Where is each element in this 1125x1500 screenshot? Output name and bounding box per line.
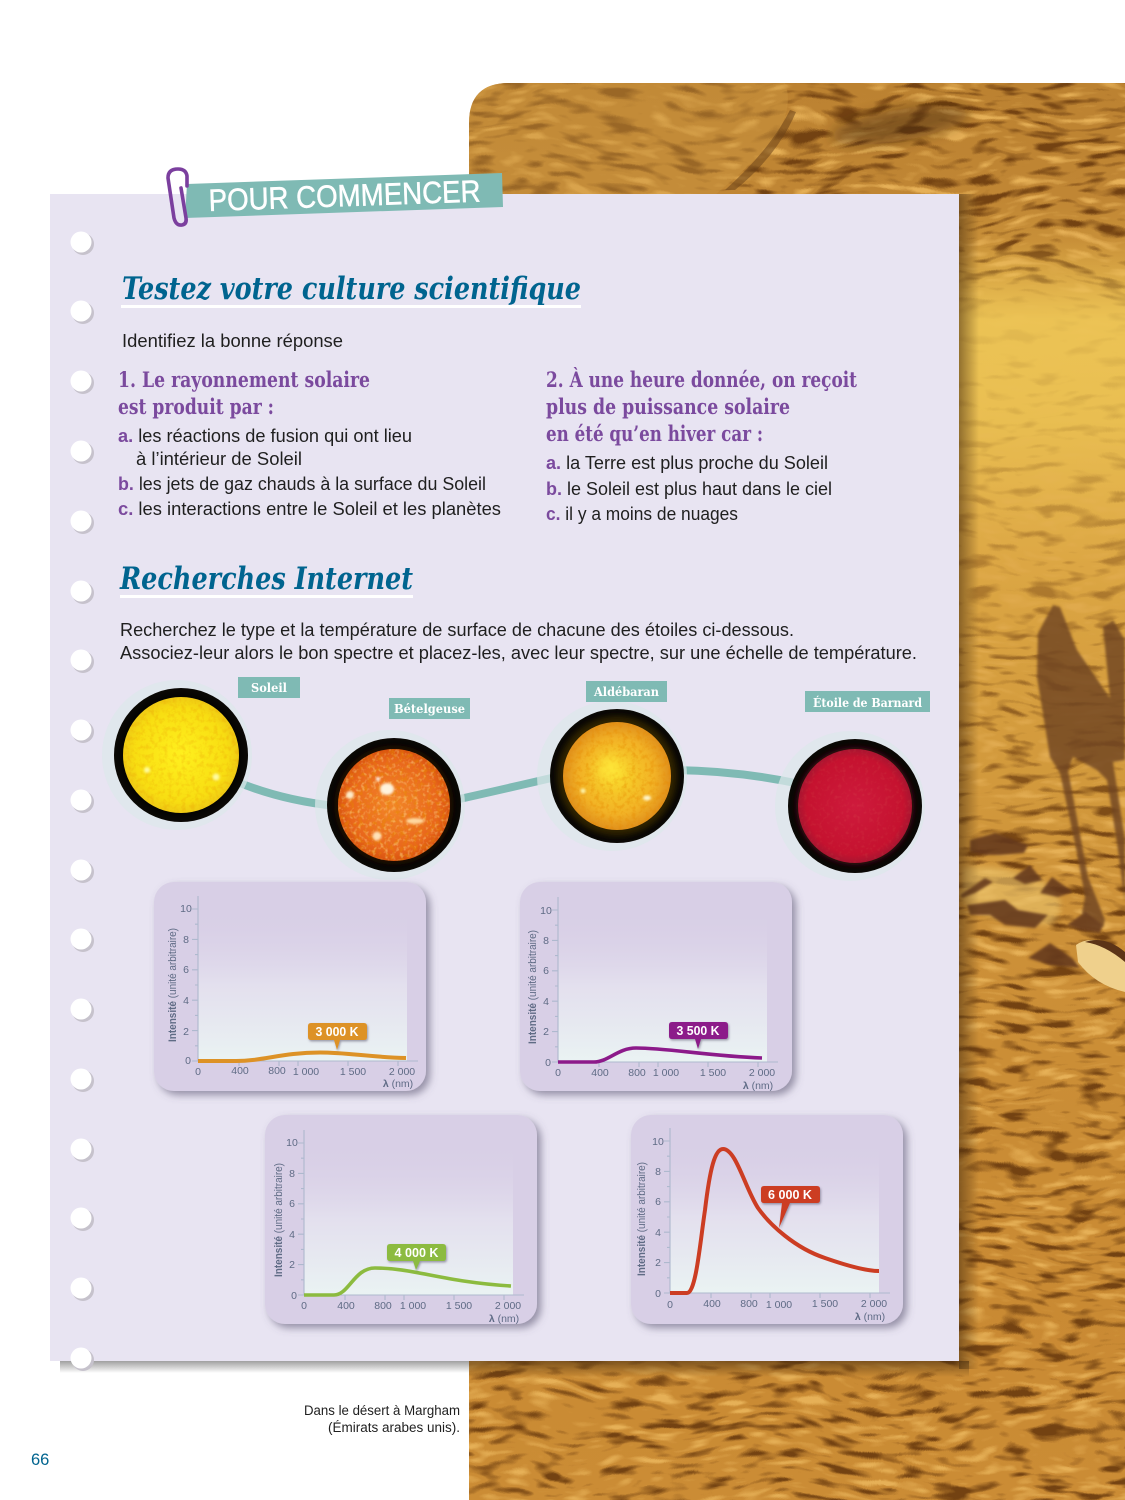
chart: 3 500 K spectrum: 800	[628, 1067, 646, 1079]
label: Soleil	[238, 677, 300, 698]
label: 3 500 K	[669, 1022, 728, 1049]
chart: 6 000 K spectrum: 0	[655, 1288, 661, 1300]
label: Aldébaran: Aldébaran	[593, 684, 659, 699]
chart: 3 000 K spectrum	[154, 882, 426, 1091]
label: Bételgeuse	[389, 698, 470, 719]
chart: 3 000 K spectrum: 6	[183, 964, 189, 976]
question 2: c. il y a moins de nuages	[546, 503, 738, 524]
chart: 3 000 K spectrum: 1 000	[293, 1066, 319, 1078]
chart: 6 000 K spectrum: 1 500	[812, 1298, 838, 1310]
camel shadow	[1037, 605, 1125, 927]
question 1: b. les jets de gaz chauds à la surface du Soleil	[118, 473, 486, 494]
chart: 4 000 K spectrum: λ (nm)	[489, 1313, 519, 1325]
smooth dune at top	[469, 83, 788, 195]
chart: 3 000 K spectrum: 4	[183, 995, 189, 1007]
connector lines between stars	[235, 770, 800, 806]
chart: 4 000 K spectrum: 1 500	[446, 1300, 472, 1312]
chart: 3 000 K spectrum: 2	[183, 1026, 189, 1038]
page number: 66	[31, 1451, 49, 1469]
icon: paperclip	[168, 169, 187, 225]
chart: 3 500 K spectrum: 1 500	[700, 1067, 726, 1079]
chart: 3 000 K spectrum: 10	[180, 903, 192, 915]
chart: 4 000 K spectrum: 800	[374, 1300, 392, 1312]
chart: 6 000 K spectrum: Intensité (unité arbitraire)	[636, 1162, 648, 1276]
chart: 4 000 K spectrum: 10	[286, 1137, 298, 1149]
chart: 3 500 K spectrum: 6	[543, 965, 549, 977]
text: research instructions	[120, 619, 917, 663]
heading: Testez votre culture scientifique: Testez votre culture scientifique	[122, 271, 581, 307]
star: Aldébaran	[537, 681, 687, 851]
heading: Recherches Internet: Recherches Internet	[119, 561, 414, 597]
label: Bételgeuse: Bételgeuse	[394, 701, 465, 716]
label: 6 000 K	[761, 1186, 820, 1228]
chart: 6 000 K spectrum: 0	[667, 1299, 673, 1311]
chart: 3 500 K spectrum: 2	[543, 1026, 549, 1038]
chart: 3 000 K spectrum: 800	[268, 1065, 286, 1077]
label: 4 000 K: 4 000 K	[394, 1246, 438, 1260]
dark ripple patch	[828, 97, 972, 153]
chart: 3 500 K spectrum: 400	[591, 1067, 609, 1079]
chart: 3 000 K spectrum: 2 000	[389, 1066, 415, 1078]
star: Bételgeuse	[315, 698, 470, 880]
label: Étoile de Barnard	[805, 691, 930, 712]
text: research instructions: Recherchez le type et la température de surface de chacune des étoiles ci-dessous.	[120, 619, 794, 640]
light sand around footprints	[962, 866, 1060, 925]
chart: 3 500 K spectrum: 2 000	[749, 1067, 775, 1079]
chart: 4 000 K spectrum: 8	[289, 1168, 295, 1180]
caption: photo: (Émirats arabes unis).	[328, 1420, 460, 1435]
chart: 6 000 K spectrum: 1 000	[766, 1299, 792, 1311]
question 1: a. les réactions de fusion qui ont lieu	[118, 425, 412, 446]
chart: 3 000 K spectrum: 1 500	[340, 1066, 366, 1078]
chart: 6 000 K spectrum: 2 000	[861, 1298, 887, 1310]
chart: 3 500 K spectrum: 10	[540, 905, 552, 917]
question 1: c. les interactions entre le Soleil et les planètes	[118, 498, 501, 519]
label: 3 000 K	[308, 1023, 367, 1050]
banner: pour commencer: POUR COMMENCER	[208, 174, 481, 218]
question 1: 1. Le rayonnement solaire	[118, 367, 370, 392]
question 2: en été qu’en hiver car :	[546, 421, 763, 446]
chart: 6 000 K spectrum: 10	[652, 1136, 664, 1148]
chart: 4 000 K spectrum: 6	[289, 1198, 295, 1210]
chart: 6 000 K spectrum: 400	[703, 1298, 721, 1310]
star: Soleil	[102, 677, 300, 830]
chart: 4 000 K spectrum: 400	[337, 1300, 355, 1312]
chart: 3 000 K spectrum: 400	[231, 1065, 249, 1077]
label: Aldébaran	[586, 681, 667, 702]
chart: 6 000 K spectrum: 8	[655, 1166, 661, 1178]
label: 4 000 K	[387, 1244, 446, 1270]
label: Soleil: Soleil	[251, 680, 287, 695]
chart: 4 000 K spectrum: 0	[301, 1300, 307, 1312]
chart: 3 500 K spectrum: 0	[555, 1067, 561, 1079]
chart: 4 000 K spectrum: 2	[289, 1259, 295, 1271]
chart: 4 000 K spectrum: Intensité (unité arbitraire)	[273, 1163, 285, 1277]
text: research instructions: Associez-leur alors le bon spectre et placez-les, avec leur spectre, sur une échelle de température.	[120, 642, 917, 663]
chart: 4 000 K spectrum: 4	[289, 1229, 295, 1241]
chart: 4 000 K spectrum: 1 000	[400, 1300, 426, 1312]
notebook punch holes	[70, 232, 94, 1371]
footprints	[960, 833, 1103, 968]
star: Étoile de Barnard	[775, 691, 930, 881]
chart: 4 000 K spectrum	[265, 1115, 537, 1325]
question 2: b. le Soleil est plus haut dans le ciel	[546, 478, 832, 499]
question 1	[118, 367, 501, 519]
paper cast shadow on the sand	[959, 194, 979, 1369]
chart: 3 500 K spectrum: 8	[543, 935, 549, 947]
chart: 3 500 K spectrum	[520, 882, 792, 1092]
question 2: a. la Terre est plus proche du Soleil	[546, 452, 828, 473]
label: 3 500 K: 3 500 K	[676, 1024, 720, 1038]
chart: 6 000 K spectrum: 4	[655, 1227, 661, 1239]
chart: 4 000 K spectrum: 2 000	[495, 1300, 521, 1312]
text: instruction: Identifiez la bonne réponse	[122, 330, 343, 351]
chart: 3 500 K spectrum: Intensité (unité arbitraire)	[527, 930, 539, 1044]
chart: 3 500 K spectrum: 1 000	[653, 1067, 679, 1079]
question 2: 2. À une heure donnée, on reçoit	[546, 367, 857, 392]
chart: 6 000 K spectrum: 800	[740, 1298, 758, 1310]
chart: 3 000 K spectrum: 8	[183, 934, 189, 946]
chart: 6 000 K spectrum: λ (nm)	[855, 1311, 885, 1323]
question 1: est produit par :	[118, 394, 274, 419]
chart: 6 000 K spectrum: 6	[655, 1196, 661, 1208]
caption: photo	[304, 1403, 460, 1435]
caption: photo: Dans le désert à Margham	[304, 1403, 460, 1418]
ripples	[469, 83, 1125, 1500]
label: 3 000 K: 3 000 K	[316, 1025, 358, 1039]
chart: 6 000 K spectrum	[631, 1115, 903, 1324]
chart: 3 500 K spectrum: 0	[545, 1057, 551, 1069]
question 2	[546, 367, 857, 524]
chart: 3 500 K spectrum: 4	[543, 996, 549, 1008]
label: 6 000 K: 6 000 K	[768, 1188, 812, 1202]
chart: 4 000 K spectrum: 0	[291, 1290, 297, 1302]
chart: 3 000 K spectrum: 0	[195, 1066, 201, 1078]
chart: 6 000 K spectrum: 2	[655, 1257, 661, 1269]
chart: 3 000 K spectrum: 0	[185, 1055, 191, 1067]
question 2: plus de puissance solaire	[546, 394, 790, 419]
question 1: à l’intérieur de Soleil	[136, 448, 302, 469]
chart: 3 500 K spectrum: λ (nm)	[743, 1080, 773, 1092]
photo: desert sand with camel shadow	[469, 83, 1125, 1500]
chart: 3 000 K spectrum: λ (nm)	[383, 1078, 413, 1090]
label: Étoile de Barnard: Étoile de Barnard	[813, 695, 922, 710]
smooth bright dune band	[959, 240, 1125, 860]
chart: 3 000 K spectrum: Intensité (unité arbitraire)	[167, 928, 179, 1042]
panel: notebook sheet	[50, 194, 959, 1361]
